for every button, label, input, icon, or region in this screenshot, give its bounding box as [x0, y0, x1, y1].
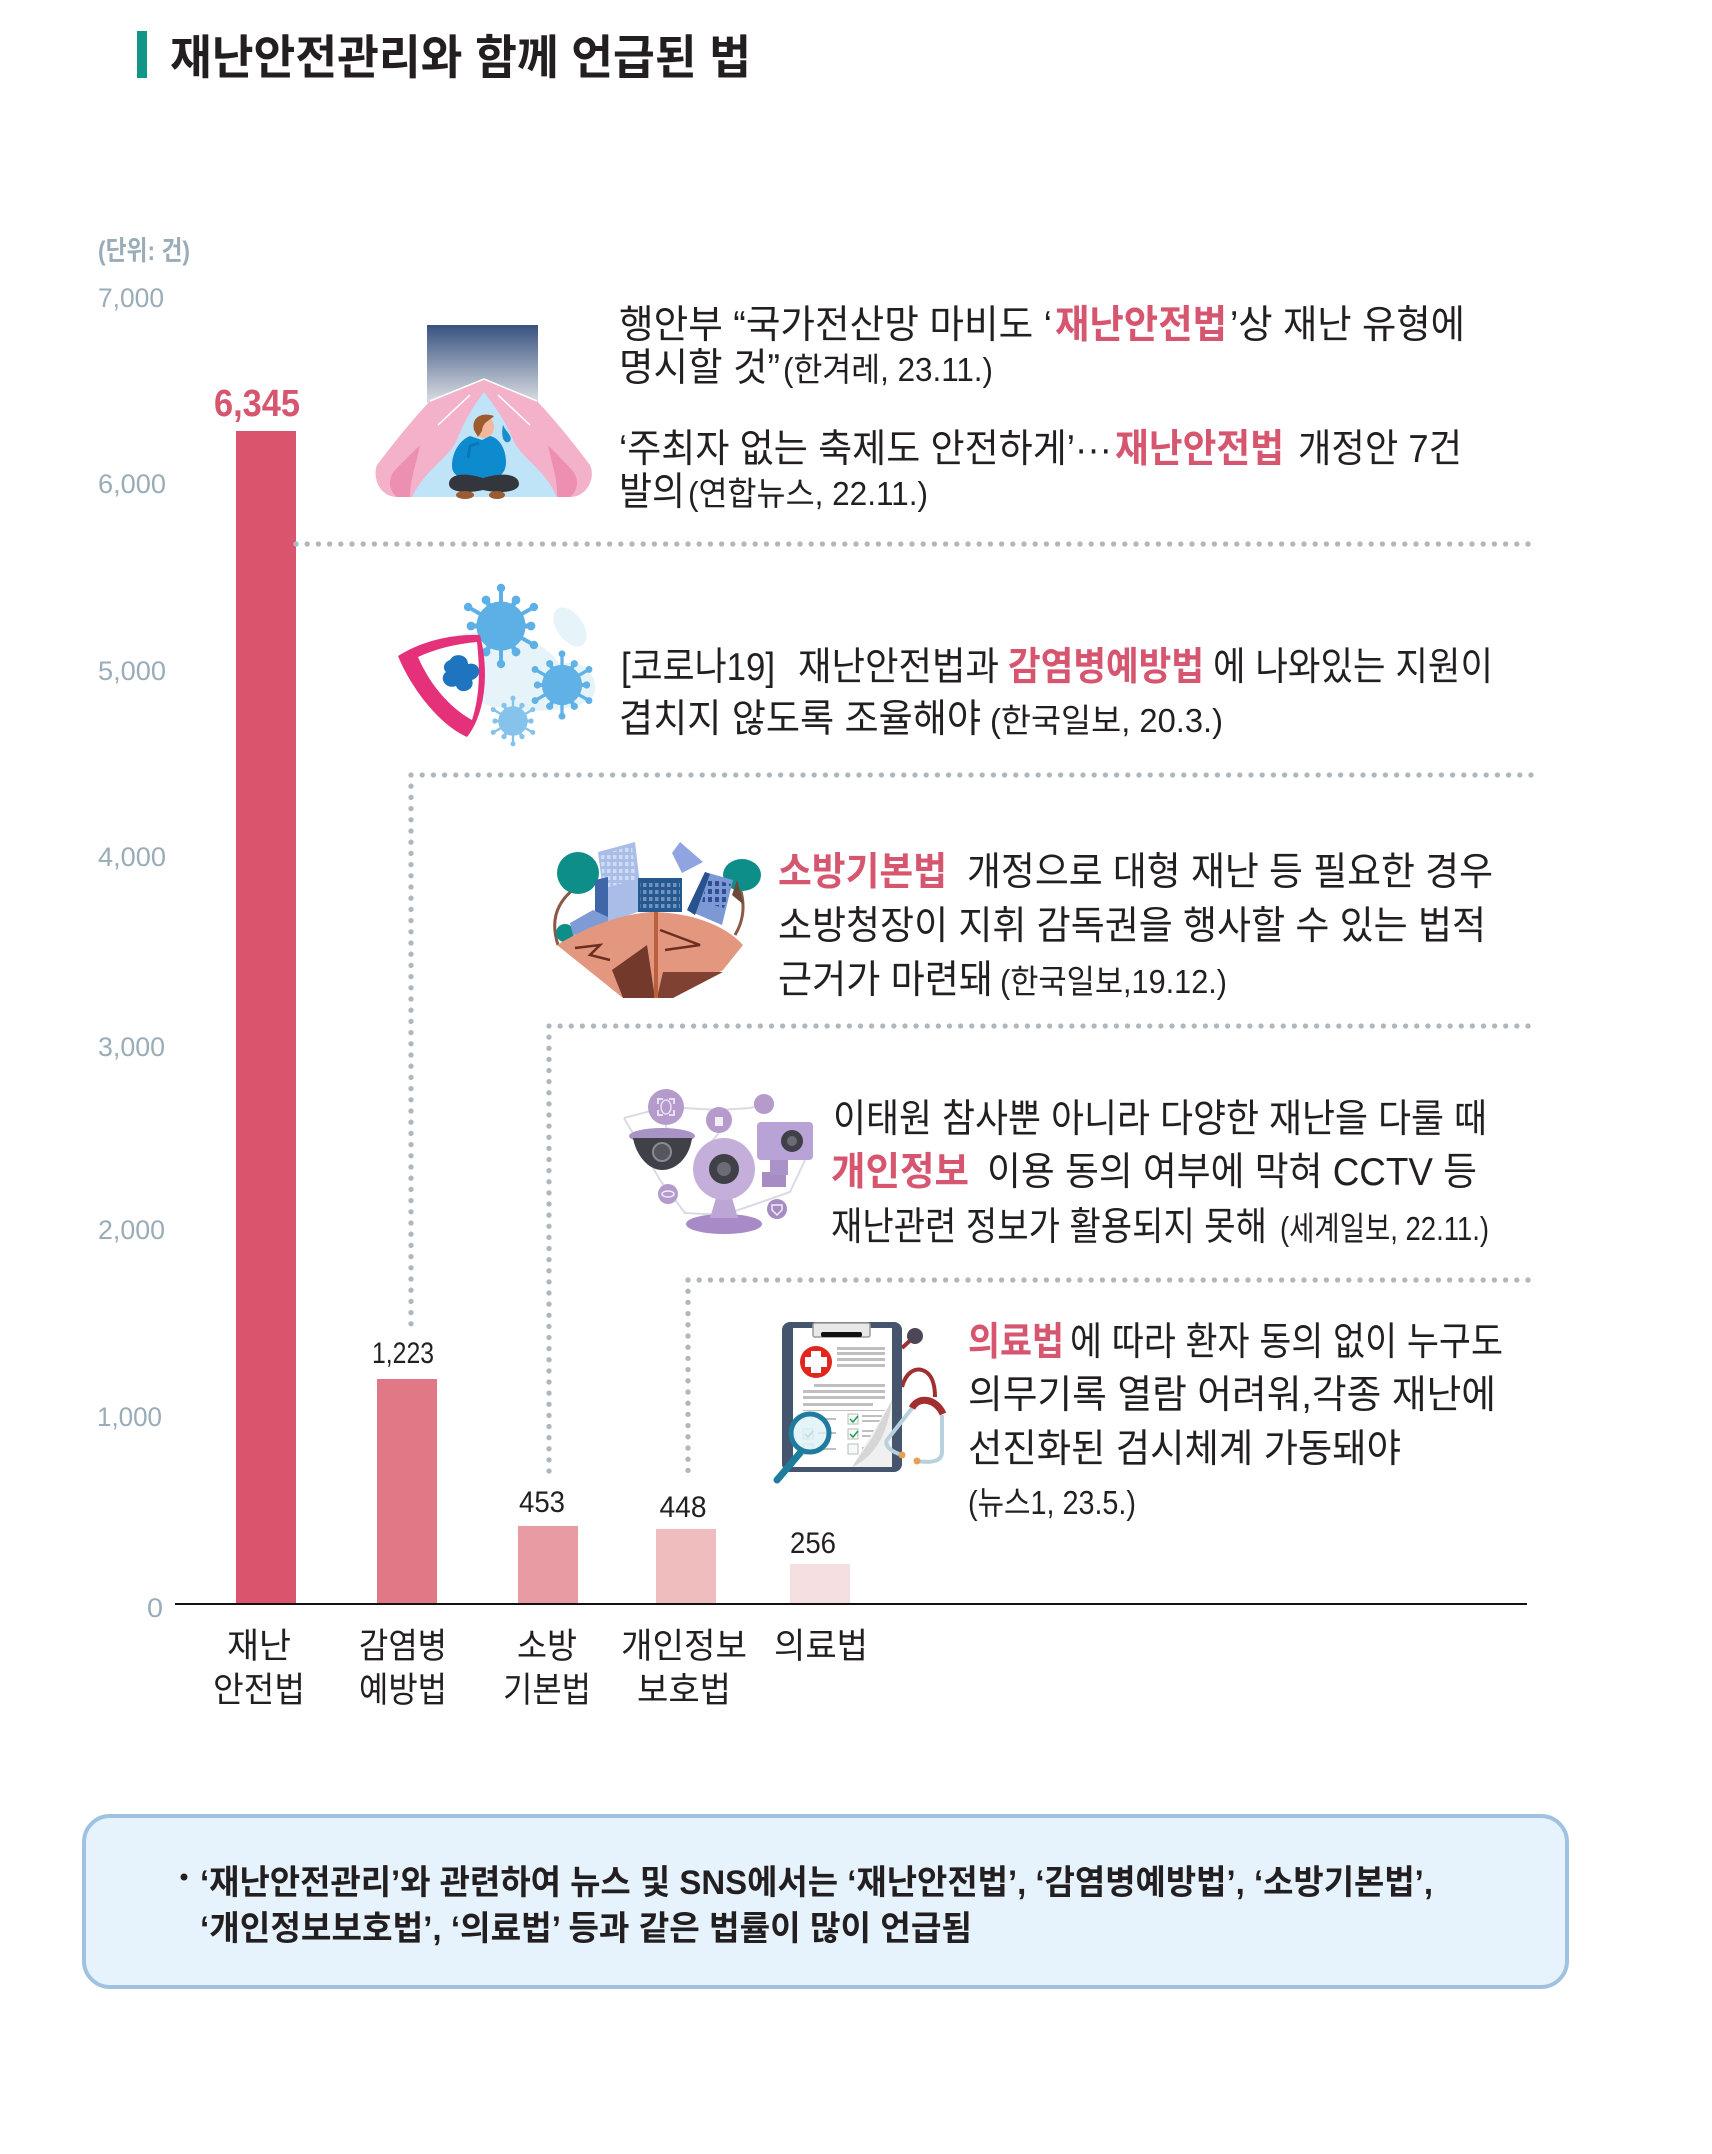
text: 감염병예방법 article: 감염병예방법: [1008, 646, 1204, 689]
bar: 감염병예방법: 감염병: [359, 1627, 447, 1666]
bar: 감염병예방법: 예방법: [359, 1671, 447, 1710]
text: 소방기본법 article: 소방기본법: [778, 851, 947, 894]
text: 감염병예방법 article: 겹치지 않도록 조율해야: [619, 698, 981, 741]
text: 재난안전법 articles: ‘주최자 없는 축제도 안전하게’···: [619, 428, 1112, 471]
text: 재난안전법 articles: 재난안전법: [1115, 428, 1284, 471]
text: 개인정보 article: 재난관련 정보가 활용되지 못해: [831, 1206, 1267, 1249]
text: 재난안전법 articles: 재난안전법: [1055, 304, 1227, 347]
text: 의료법 article: 의무기록 열람 어려워,각종 재난에: [968, 1374, 1496, 1417]
text: 의료법 article: 의료법: [968, 1321, 1064, 1364]
text: 소방기본법 article: 소방청장이 지휘 감독권을 행사할 수 있는 법적: [778, 905, 1486, 948]
bar: 개인정보보호법: [621, 1491, 747, 1710]
text: 재난안전법 articles: ’상 재난 유형에: [1230, 304, 1465, 347]
y axis labels: 6,000: [98, 469, 166, 499]
text: 재난안전법 articles: (한겨레, 23.11.): [783, 351, 993, 388]
text: 개인정보 article: [831, 1098, 1489, 1249]
y axis labels: 5,000: [98, 656, 166, 686]
text: 의료법 article: [968, 1321, 1503, 1521]
text: 개인정보 article: 이용 동의 여부에 막혀 CCTV 등: [987, 1151, 1477, 1194]
text: 재난안전법 articles: 발의: [619, 471, 685, 514]
bar: 의료법: 256: [790, 1527, 836, 1560]
y axis labels: 4,000: [98, 842, 166, 872]
text: 의료법 article: 에 따라 환자 동의 없이 누구도: [1070, 1321, 1503, 1364]
text: 소방기본법 article: [778, 851, 1493, 1002]
icon: earthquake and buildings: [555, 842, 761, 998]
bar: 감염병예방법: [359, 1337, 447, 1710]
bar: 재난안전법: 안전법: [213, 1671, 305, 1710]
bar: 개인정보보호법: 448: [660, 1491, 706, 1524]
text: 감염병예방법 article: [619, 646, 1493, 741]
y axis labels: [97, 236, 190, 1623]
text: 재난안전법 articles: 명시할 것”: [619, 347, 780, 390]
text: 감염병예방법 article: (한국일보, 20.3.): [990, 702, 1223, 739]
text: 개인정보 article: 개인정보: [831, 1151, 969, 1194]
bar: 재난안전법: 재난: [227, 1627, 291, 1666]
text: 의료법 article: (뉴스1, 23.5.): [968, 1484, 1136, 1521]
text: 개인정보 article: 이태원 참사뿐 아니라 다양한 재난을 다룰 때: [833, 1098, 1487, 1141]
bar chart: [175, 383, 1527, 1710]
icon: virus and shield: [398, 584, 595, 746]
text: 소방기본법 article: 개정으로 대형 재난 등 필요한 경우: [967, 851, 1493, 894]
title: 재난안전관리와 함께 언급된 법: [170, 31, 751, 84]
bar: 의료법: 의료법: [774, 1627, 868, 1666]
text: 감염병예방법 article: 재난안전법과: [798, 646, 999, 689]
y axis labels: 2,000: [98, 1215, 165, 1245]
bar: 소방기본법: 기본법: [503, 1671, 591, 1710]
x axis line: [175, 1603, 1527, 1605]
text: 개인정보 article: (세계일보, 22.11.): [1280, 1210, 1489, 1247]
panel: 소방기본법: [555, 842, 1493, 1002]
y axis labels: 3,000: [98, 1032, 165, 1062]
text: 재난안전법 articles: (연합뉴스, 22.11.): [688, 475, 928, 512]
text: 재난안전법 articles: 개정안 7건: [1298, 428, 1462, 471]
text: 소방기본법 article: (한국일보,19.12.): [1000, 963, 1227, 1000]
callout: summary box: [84, 1816, 1567, 1987]
bar: 개인정보보호법: 개인정보: [621, 1627, 747, 1666]
bar: 소방기본법: 소방: [517, 1627, 577, 1666]
callout: summary box: ‘개인정보보호법’, ‘의료법’ 등과 같은 법률이 많이 언급됨: [200, 1910, 972, 1948]
text: 재난안전법 articles: [619, 304, 1465, 514]
y axis labels: 0: [147, 1593, 163, 1623]
text: 감염병예방법 article: 에 나와있는 지원이: [1213, 646, 1493, 689]
bar: 감염병예방법: 1,223: [372, 1337, 434, 1370]
y axis labels: 1,000: [97, 1402, 162, 1432]
bar: 재난안전법: [213, 383, 305, 1710]
icon: person in tent under rain: [376, 325, 592, 499]
panel: 재난안전법: [376, 304, 1465, 514]
bar: 의료법: [774, 1527, 868, 1666]
icon: medical chart and stethoscope: [777, 1322, 943, 1480]
bar: 개인정보보호법: 보호법: [637, 1671, 731, 1710]
bar: 재난안전법: 6,345: [214, 383, 300, 425]
bar: 소방기본법: [503, 1486, 591, 1710]
text: 감염병예방법 article: [코로나19]: [621, 646, 775, 689]
bar: 소방기본법: 453: [519, 1486, 565, 1519]
y axis labels: (단위: 건): [98, 236, 190, 266]
text: 재난안전법 articles: 행안부 “국가전산망 마비도 ‘: [619, 304, 1052, 347]
icon: CCTV cameras: [624, 1089, 813, 1234]
panel: 개인정보보호법: [624, 1089, 1489, 1249]
text: 소방기본법 article: 근거가 마련돼: [778, 959, 993, 1002]
panel: 감염병예방법: [398, 584, 1493, 746]
panel: 의료법: [777, 1321, 1503, 1521]
text: 의료법 article: 선진화된 검시체계 가동돼야: [968, 1428, 1401, 1471]
callout: summary box: ‘재난안전관리’와 관련하여 뉴스 및 SNS에서는 ‘재난안전법’, ‘감염병예방법’, ‘소방기본법’,: [200, 1864, 1433, 1902]
y axis labels: 7,000: [98, 283, 164, 313]
